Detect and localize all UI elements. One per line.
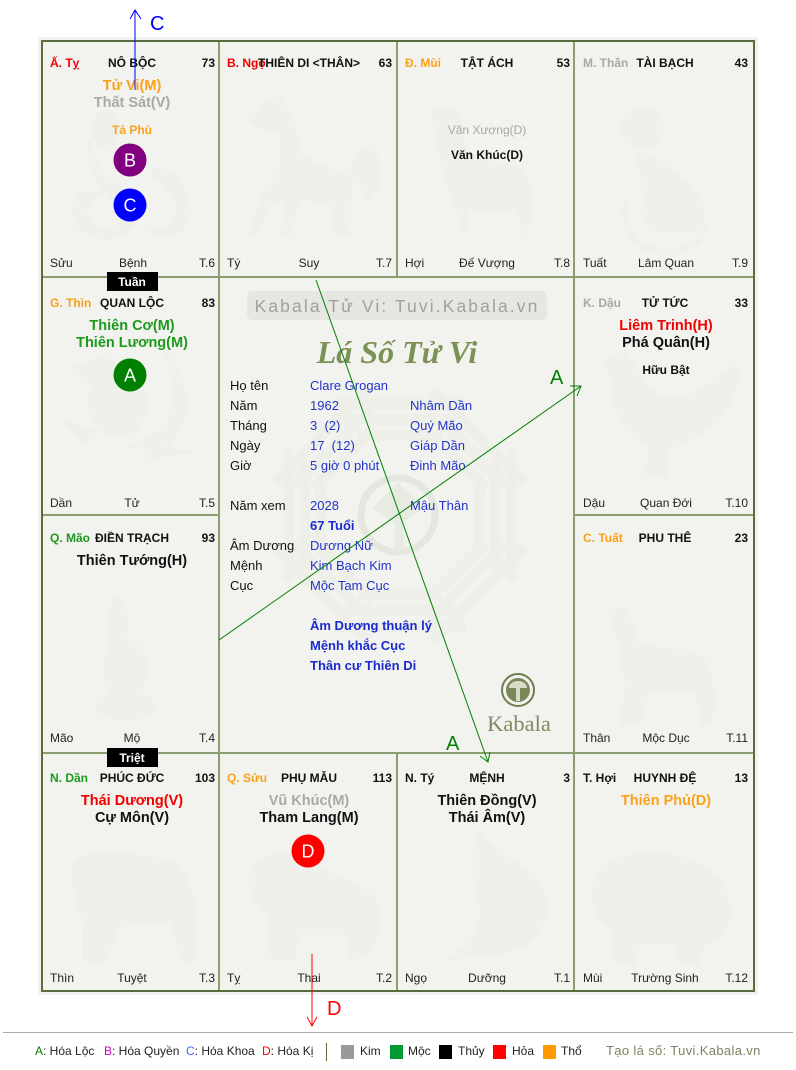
legend: Mộc [408,1044,431,1058]
palace: Thiên Di: B. Ngọ [227,56,266,70]
palace: Nô Bộc: Sửu [50,256,73,270]
palace: Tài Bạch: 43 [735,56,748,70]
palace: Quan Lộc: T.5 [199,496,215,510]
personal info: Ngày [230,438,261,453]
legend: Tạo lá số: Tuvi.Kabala.vn [606,1043,761,1058]
palace: Quan Lộc: Dần [50,496,72,510]
legend: A: Hóa Lộc [35,1044,94,1058]
palace: Phúc Đức: Tuyệt [117,971,147,985]
legend [3,1032,793,1061]
palace: Huynh Đệ: T. Hợi [583,771,616,785]
palace: Huynh Đệ [583,770,748,985]
palace: Tật Ách: Văn Xương(D) [448,123,526,137]
palace: Quan Lộc [50,295,215,510]
personal info: Kim Bạch Kim [310,558,392,573]
title: Lá Số Tử Vi: Lá Số Tử Vi [316,334,477,370]
palace: Mệnh: 3 [563,771,570,785]
personal info: Dương Nữ [310,538,373,553]
palace: Huynh Đệ: HUYNH ĐỆ [634,770,696,785]
palace: Quan Lộc: Thiên Cơ(M) [89,318,175,334]
palace: Quan Lộc: Tử [124,496,140,510]
personal info: Clare Grogan [310,378,388,393]
palace: Tài Bạch: M. Thân [583,56,628,70]
palace: Nô Bộc: Tả Phù [112,123,152,137]
personal info: Giáp Dần [410,438,465,453]
personal info: Thân cư Thiên Di [310,658,416,673]
palace: Phụ Mẫu: 113 [373,771,392,785]
animal watermark: monkey [620,106,708,255]
arrow: Hóa Lộc to Mệnh [316,280,490,762]
palace: Tài Bạch: T.9 [732,256,748,270]
personal info: Họ tên [230,378,268,393]
palace: Mệnh: N. Tý [405,771,435,785]
palace: Phu Thê: PHU THÊ [639,530,691,545]
personal info: Đinh Mão [410,458,466,473]
watermark banner [247,291,547,320]
palace: Tật Ách: Hợi [405,256,424,270]
personal info: Mệnh khắc Cục [310,638,405,653]
personal info: Nhâm Dần [410,398,472,413]
palace: Quan Lộc: Thiên Lương(M) [76,335,188,351]
palace: Tật Ách: TẬT ÁCH [461,55,513,70]
palace: Phụ Mẫu: Vũ Khúc(M) [269,793,349,809]
watermark: bagua [271,386,529,644]
palace: Huynh Đệ: Mùi [583,971,602,985]
personal info: Tháng [230,418,267,433]
palace: Mệnh: T.1 [554,971,570,985]
palace: Huynh Đệ: 13 [735,771,748,785]
animal watermark: snake [72,108,191,240]
palace: Huynh Đệ: Trường Sinh [631,971,699,985]
palace: Thiên Di: Tý [227,256,240,270]
palace: Tử Tức: Phá Quân(H) [622,335,710,351]
palace: Phụ Mẫu: Tỵ [227,971,240,985]
palace: Tật Ách: Đế Vượng [459,256,515,270]
palace: Phụ Mẫu: PHỤ MẪU [281,770,337,785]
palace: Nô Bộc: T.6 [199,256,215,270]
arrow: Hóa Khoa [130,10,141,90]
animal watermark: tiger [249,852,380,960]
watermark banner: Kabala Tử Vi: Tuvi.Kabala.vn [255,296,539,316]
palace: Điền Trạch: Mão [50,731,74,745]
palace: Mệnh: Ngọ [405,971,427,985]
marker: B [114,144,146,176]
palace: Điền Trạch: ĐIỀN TRẠCH [95,530,169,545]
animal watermark: dog [605,605,714,725]
animal watermark: rooster [602,350,739,477]
personal info: Mậu Thân [410,498,468,513]
palace: Quan Lộc: 83 [202,296,215,310]
palace: Tài Bạch: Lâm Quan [638,256,694,270]
palace: Tử Tức: T.10 [725,496,748,510]
personal info: 17 (12) [310,438,355,453]
badge: Triệt [107,748,158,767]
marker: A: A [124,366,136,386]
legend: Kim [360,1044,381,1058]
palace: Tật Ách: Văn Khúc(D) [451,148,523,162]
badge: Tuần: Tuần [118,275,146,289]
marker: D [292,834,324,868]
palace: Tài Bạch: Tuất [583,256,607,270]
palace: Phu Thê: 23 [735,531,748,545]
palace: Phúc Đức: T.3 [199,971,215,985]
legend: B: Hóa Quyền [104,1044,179,1058]
personal info: 67 Tuổi [310,518,355,533]
marker: A [114,358,146,392]
palace: Mệnh: Thái Âm(V) [449,808,525,826]
personal info: 1962 [310,398,339,413]
palace: Mệnh: MỆNH [469,770,505,785]
personal info: Quý Mão [410,418,463,433]
palace: Nô Bộc: Bệnh [119,256,147,270]
palace: Phu Thê: C. Tuất [583,531,623,545]
palace: Nô Bộc: Ấ. Tỵ [50,55,80,70]
palace: Phúc Đức: Thìn [50,971,74,985]
palace: Phúc Đức: 103 [195,771,215,785]
palace: Thiên Di: THIÊN DI <THÂN> [258,55,360,70]
marker: B: B [124,150,136,170]
logo: Kabala: Kabala [487,711,551,736]
palace: Phụ Mẫu: Thai [297,971,321,985]
personal info: 3 (2) [310,418,340,433]
personal info: Âm Dương thuận lý [310,618,433,633]
palace: Phúc Đức: PHÚC ĐỨC [100,770,165,785]
arrow label: C: C [150,13,164,35]
palace: Thiên Di [227,55,392,270]
animal watermark: dragon [60,352,195,460]
palace: Mệnh: Thiên Đồng(V) [437,793,537,809]
personal info: Năm xem [230,498,286,513]
palace: Tử Tức: TỬ TỨC [642,295,689,310]
personal info: Cục [230,578,254,593]
animal watermark: horse [250,95,380,235]
palace: Tử Tức [583,295,748,510]
palace: Thiên Di: Suy [299,256,319,270]
palace: Tử Tức: Quan Đới [640,496,692,510]
marker: D: D [302,842,314,862]
palace: Phụ Mẫu: Q. Sửu [227,771,267,785]
palace: Tật Ách: Đ. Mùi [405,56,441,70]
palace: Điền Trạch: Mộ [124,731,141,745]
legend: Thổ [561,1044,582,1058]
personal info: Mộc Tam Cục [310,578,390,593]
grid lines [41,41,754,991]
palace: Quan Lộc: G. Thìn [50,296,91,310]
palace: Tật Ách: T.8 [554,256,570,270]
palace: Phụ Mẫu: T.2 [376,971,392,985]
palace: Phu Thê [583,530,748,745]
palace: Mệnh [405,770,570,985]
animal watermark: goat [430,106,533,240]
palace: Huynh Đệ: Thiên Phủ(D) [621,793,711,809]
palace: Điền Trạch: Thiên Tướng(H) [77,553,187,569]
legend: C: Hóa Khoa [186,1044,255,1058]
logo: Kabala [487,674,551,736]
palace: Phụ Mẫu [227,770,392,985]
palace: Thiên Di: 63 [379,56,392,70]
personal info: Âm Dương [230,538,294,553]
arrow: Hóa Lộc to Tử Tức [219,386,581,640]
palace: Phụ Mẫu: Tham Lang(M) [259,810,359,826]
palace: Phúc Đức [50,770,215,985]
animal watermark: buffalo [71,850,196,962]
palace: Nô Bộc [50,55,215,270]
palace: Tật Ách [405,55,570,270]
personal info: Năm [230,398,257,413]
palace: Mệnh: Dưỡng [468,971,506,985]
legend: Hỏa [512,1044,534,1058]
palace: Tài Bạch [583,55,748,270]
arrow label: A: A [550,367,564,389]
palace: Điền Trạch: 93 [202,531,215,545]
palace: Phúc Đức: Cự Môn(V) [95,810,169,826]
personal info: Mệnh [230,558,263,573]
palace: Phúc Đức: Thái Dương(V) [81,793,183,809]
palace: Điền Trạch [50,530,215,745]
palace: Tật Ách: 53 [557,56,570,70]
palace: Huynh Đệ: T.12 [725,971,748,985]
legend: D: Hóa Kị [262,1044,313,1058]
palace: Phu Thê: Thân [583,731,610,745]
personal info: 5 giờ 0 phút [310,458,380,473]
palace: Tử Tức: Liêm Trinh(H) [619,318,713,334]
badge: Tuần [107,272,158,291]
palace: Tử Tức: Dậu [583,496,605,510]
palace: Nô Bộc: Thất Sát(V) [94,95,170,111]
animal watermark: rat [445,825,547,960]
palace: Điền Trạch: Q. Mão [50,531,90,545]
personal info: Giờ [230,458,252,473]
animal watermark: rabbit [95,595,155,721]
arrow: Hóa Kị [307,954,317,1026]
palace: Phúc Đức: N. Dần [50,771,88,785]
animal watermark: pig [591,852,730,965]
palace: Nô Bộc: Tử Vi(M) [103,78,161,94]
badge: Triệt: Triệt [119,751,145,765]
palace: Thiên Di: T.7 [376,256,392,270]
personal info: 2028 [310,498,339,513]
palace: Nô Bộc: 73 [202,56,215,70]
palace: Phu Thê: T.11 [726,731,748,745]
personal info [230,378,472,673]
arrow label: D: D [327,998,341,1020]
palace: Nô Bộc: NÔ BỘC [108,55,156,70]
palace: Phu Thê: Mộc Dục [642,731,690,745]
palace: Điền Trạch: T.4 [199,731,215,745]
palace: Quan Lộc: QUAN LỘC [100,295,164,310]
palace: Tử Tức: K. Dậu [583,296,621,310]
palace: Tài Bạch: TÀI BẠCH [636,55,694,70]
palace: Tử Tức: Hữu Bật [642,363,690,377]
marker: C: C [124,196,136,216]
palace: Tử Tức: 33 [735,296,748,310]
marker: C [114,188,146,222]
arrow label: A: A [446,733,460,755]
legend: Thủy [458,1044,485,1058]
